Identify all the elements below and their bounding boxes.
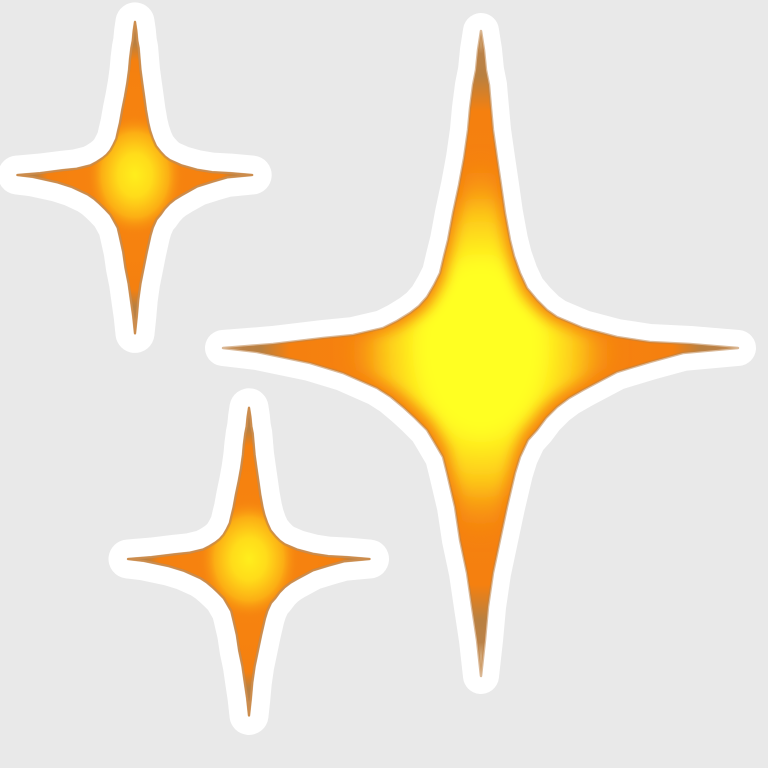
sparkle: top left star [17, 22, 252, 333]
sparkle: bottom star [128, 408, 370, 715]
sparkle: large right star [223, 31, 738, 676]
